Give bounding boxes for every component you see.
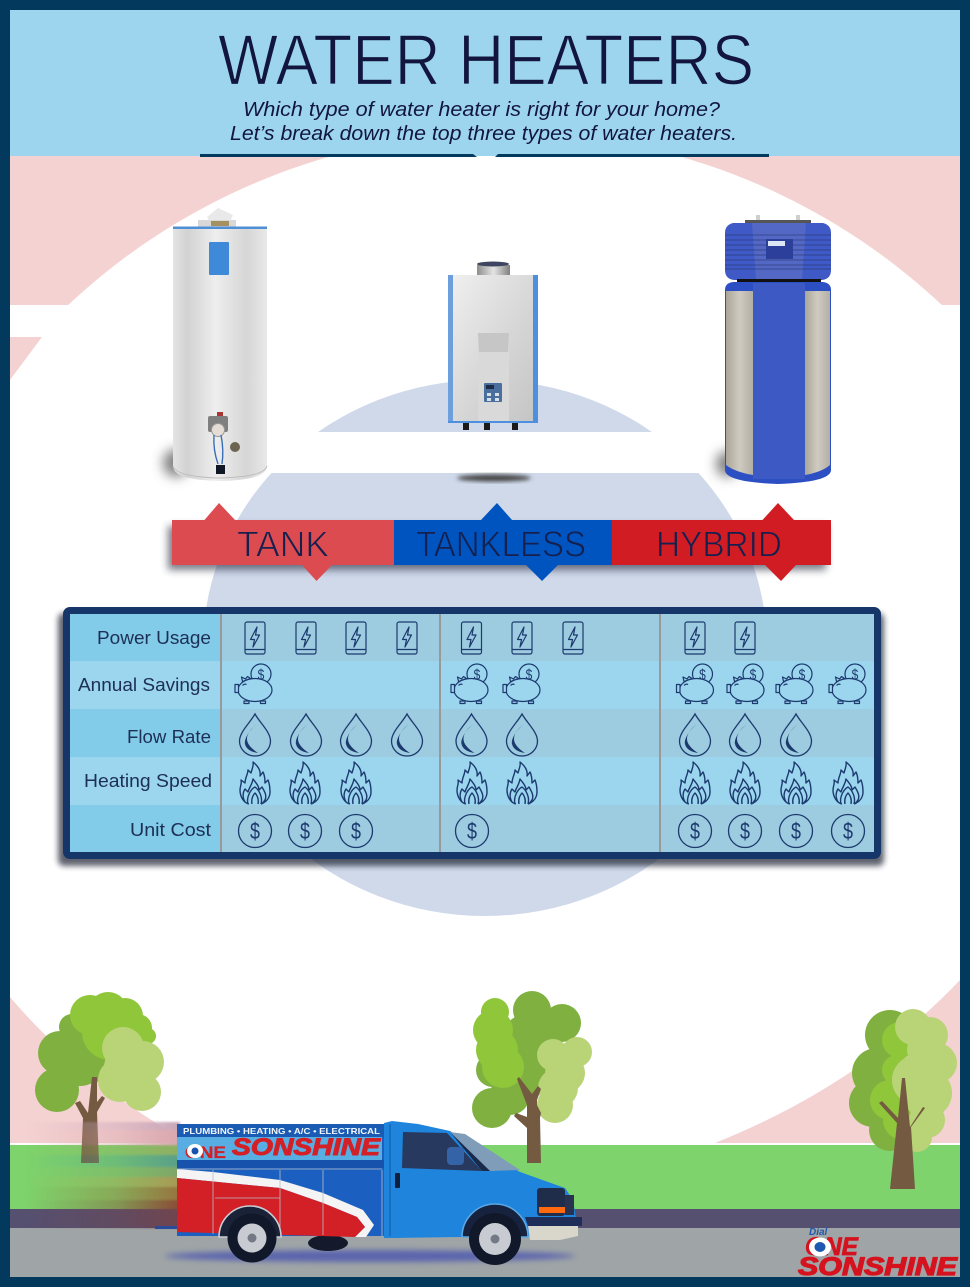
curb	[10, 1209, 960, 1228]
company logo: Dial	[809, 1227, 828, 1238]
mirror	[447, 1147, 464, 1165]
flow rate icons	[240, 714, 812, 756]
door handle	[395, 1173, 400, 1188]
tankless water heater	[448, 262, 538, 482]
front wheel	[462, 1204, 528, 1265]
heating speed icons	[240, 762, 863, 804]
tank water heater	[163, 208, 267, 481]
subtitle: Which type of water heater is right for your home?	[243, 99, 721, 121]
road	[10, 1228, 960, 1277]
grass	[10, 1145, 960, 1209]
service van: ONE	[185, 1143, 226, 1162]
background: lower pink corners	[10, 980, 960, 1143]
subtitle: Let’s break down the top three types of water heaters.	[230, 123, 737, 145]
swoosh	[177, 1169, 374, 1237]
annual savings icons	[235, 664, 866, 704]
header panel	[10, 10, 960, 157]
title: WATER HEATERS	[218, 22, 754, 100]
comparison table	[63, 607, 881, 859]
banner: hybrid	[612, 503, 831, 581]
row labels: Flow Rate	[127, 726, 211, 747]
row labels: Annual Savings	[78, 674, 210, 695]
service van	[155, 1121, 582, 1265]
tree: left	[35, 992, 164, 1163]
company logo	[798, 1227, 959, 1281]
windshield	[450, 1132, 520, 1171]
row labels: Unit Cost	[130, 819, 211, 840]
headlight	[537, 1188, 565, 1216]
power usage icons	[245, 622, 755, 654]
bumper	[525, 1217, 582, 1226]
middle wheel	[308, 1235, 348, 1251]
banner: tank	[172, 503, 394, 581]
tree: middle	[472, 991, 592, 1163]
comparison table shadow	[58, 613, 884, 866]
compartment lines	[177, 1169, 382, 1236]
row backgrounds	[70, 614, 874, 852]
rear step	[155, 1226, 179, 1229]
type banner: shadow	[168, 526, 826, 570]
row labels: Power Usage	[97, 627, 211, 648]
van lettering: PLUMBING • HEATING • A/C • ELECTRICAL	[183, 1126, 380, 1136]
unit cost icons	[238, 814, 864, 848]
rear wheel	[219, 1206, 281, 1262]
tree: right	[849, 1009, 957, 1189]
van ground shadow	[165, 1250, 575, 1262]
row labels: Heating Speed	[84, 770, 212, 791]
service van: SONSHINE	[232, 1134, 381, 1161]
background: blue ellipse	[200, 380, 770, 916]
banner: tankless	[394, 503, 612, 581]
grille	[565, 1195, 574, 1215]
banner: tankless: TANKLESS	[416, 523, 586, 564]
header underline	[200, 154, 769, 157]
company logo: ONE	[805, 1233, 859, 1261]
side windows	[402, 1132, 482, 1171]
cab body	[384, 1121, 576, 1238]
cargo box	[177, 1124, 385, 1236]
company logo: SONSHINE	[798, 1253, 959, 1281]
banner: tank: TANK	[237, 523, 329, 564]
motion blur trail	[36, 1120, 182, 1230]
row labels	[78, 627, 212, 840]
banner: hybrid: HYBRID	[656, 523, 782, 564]
hybrid water heater	[716, 215, 831, 484]
subtitle	[230, 99, 737, 145]
